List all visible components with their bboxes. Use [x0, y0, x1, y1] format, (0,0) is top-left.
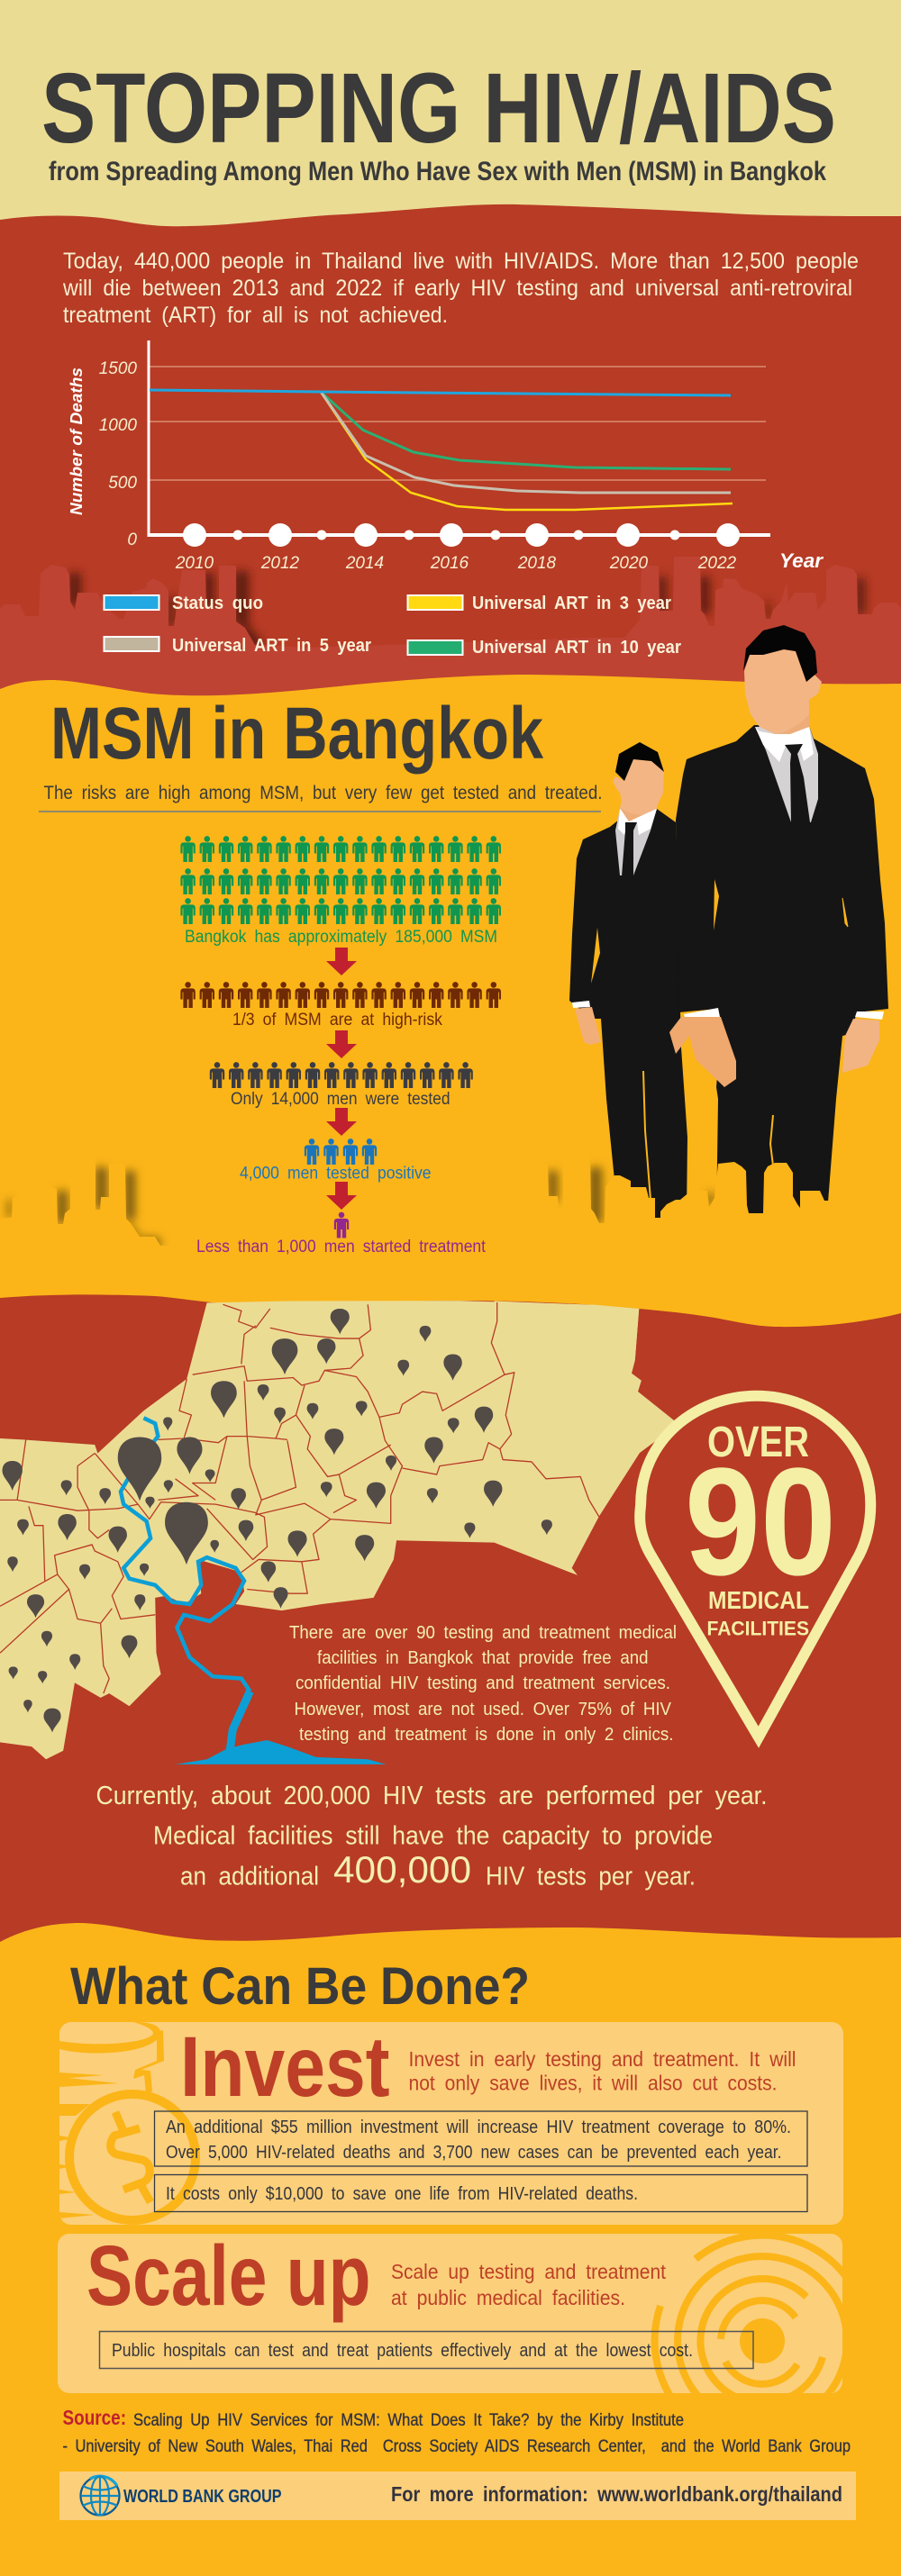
big pin text: OVER 90 MEDICAL FACILITIES: 90: [685, 1437, 836, 1608]
footer bar: For more information: www.worldbank.org/thailand: [391, 2482, 842, 2506]
intro text: treatment (ART) for all is not achieved.: [63, 303, 448, 328]
panel: Invest: It costs only $10,000 to save one life from HIV-related deaths.: [166, 2183, 638, 2204]
source: Scaling Up HIV Services for MSM: What Does It Take? by the Kirby Institute: [133, 2411, 684, 2430]
people chart: positive: 4,000 men tested positive: [240, 1164, 431, 1184]
man: smaller figure: [569, 742, 687, 1225]
chart legend: [105, 594, 681, 658]
panel: Invest: [54, 2019, 843, 2225]
chart: deaths projection: 2018: [517, 554, 557, 573]
chart legend: Status quo: [172, 594, 263, 613]
map eastern province: [495, 1302, 674, 1516]
panel: Invest: not only save lives, it will also cut costs.: [409, 2072, 777, 2095]
facility pins: [3, 1309, 552, 1733]
chart legend: Universal ART in 10 year: [472, 638, 681, 658]
panel: Scale up: Scale up testing and treatment: [391, 2260, 667, 2283]
chart legend: Universal ART in 3 year: [472, 594, 671, 613]
people chart: high-risk: [180, 982, 501, 1029]
chart: deaths projection: 2012: [260, 554, 300, 573]
people chart: 185,000 MSM: Bangkok has approximately 185,000 MSM: [185, 928, 497, 947]
chart: deaths projection: 2022: [697, 554, 737, 573]
people chart: treatment: Less than 1,000 men started treatment: [196, 1238, 487, 1256]
map paragraph: [289, 1623, 677, 1745]
source: [63, 2406, 851, 2456]
panel: Scale up: at public medical facilities.: [391, 2286, 625, 2309]
panel: Invest: Invest in early testing and treatment. It will: [409, 2047, 796, 2071]
heading: MSM in Bangkok: MSM in Bangkok: [50, 693, 543, 775]
subheading: The risks are high among MSM, but very few get tested and treated.: [43, 783, 602, 803]
map paragraph: facilities in Bangkok that provide free and: [317, 1648, 649, 1668]
footer bar: WORLD BANK GROUP: [123, 2487, 281, 2507]
map district boundaries: [0, 1302, 601, 1693]
footer bar: [59, 2472, 856, 2520]
capacity statement: [96, 1782, 768, 1891]
background: gold MSM section: [0, 667, 901, 1315]
skyline silhouette: gold, left: [0, 1156, 216, 1279]
man: larger figure: [669, 625, 888, 1225]
capacity statement: Medical facilities still have the capacity to provide: [153, 1821, 713, 1850]
icon: target rings: [651, 2234, 842, 2393]
background: red intro section: [0, 204, 901, 698]
map paragraph: There are over 90 testing and treatment medical: [289, 1623, 677, 1643]
arrow: [326, 948, 357, 975]
map paragraph: confidential HIV testing and treatment services.: [296, 1673, 670, 1693]
background: red map section: [0, 1294, 901, 1955]
arrow: [326, 1108, 357, 1136]
panel: Invest: Over 5,000 HIV-related deaths and 3,700 new cases can be prevented each year.: [166, 2142, 782, 2163]
panel: Scale up: [58, 2234, 842, 2393]
chart: deaths projection: 2020: [609, 554, 649, 573]
icon: World Bank globe: [81, 2476, 119, 2515]
capacity statement: an additional: [180, 1863, 319, 1891]
big pin text: OVER 90 MEDICAL FACILITIES: MEDICAL: [708, 1586, 809, 1614]
chart: deaths projection: 1500: [99, 359, 137, 378]
panel: Invest: An additional $55 million investment will increase HIV treatment coverage to 80%.: [166, 2117, 791, 2137]
people chart: positive: [240, 1138, 431, 1184]
panel: Invest: Invest: [180, 2019, 389, 2115]
chart: deaths projection: 2016: [430, 554, 469, 573]
city skyline: red: [0, 557, 901, 698]
chart: deaths projection: 2010: [175, 554, 214, 573]
chart: deaths projection: [68, 340, 824, 573]
people chart: treatment: [196, 1212, 487, 1256]
skyline shadows: gold: [7, 1167, 714, 1247]
chart legend: Universal ART in 5 year: [172, 636, 371, 656]
map of Bangkok: [0, 1301, 870, 1764]
intro text: [62, 249, 859, 328]
map paragraph: However, most are not used. Over 75% of HIV: [294, 1700, 672, 1719]
chart: deaths projection: Year: [779, 549, 824, 572]
chart: deaths projection: 500: [108, 474, 137, 493]
people chart: tested: [210, 1062, 473, 1109]
capacity statement: Currently, about 200,000 HIV tests are performed per year.: [96, 1782, 768, 1810]
icon: coins: [54, 2022, 196, 2225]
skyline silhouette: gold, right: [529, 1155, 901, 1279]
chart: deaths projection: 2014: [345, 554, 384, 573]
people chart: 185,000 MSM: [180, 836, 501, 947]
big pin text: OVER 90 MEDICAL FACILITIES: OVER: [707, 1419, 809, 1466]
big pin outline: [640, 1396, 870, 1737]
chart: deaths projection: 0: [127, 531, 137, 549]
people chart: high-risk: 1/3 of MSM are at high-risk: [232, 1011, 442, 1029]
panel: Scale up: Scale up: [86, 2228, 371, 2324]
capacity statement: HIV tests per year.: [486, 1863, 696, 1891]
big pin text: OVER 90 MEDICAL FACILITIES: FACILITIES: [706, 1618, 809, 1639]
arrow: [326, 1030, 357, 1058]
capacity statement: 400,000: [333, 1848, 471, 1891]
intro text: will die between 2013 and 2022 if early HIV testing and universal anti-retroviral: [62, 276, 852, 301]
source: Source:: [63, 2406, 126, 2429]
background: gold action section: [0, 1923, 901, 2576]
people chart: tested: Only 14,000 men were tested: [231, 1090, 450, 1109]
intro text: Today, 440,000 people in Thailand live with HIV/AIDS. More than 12,500 people: [63, 249, 859, 274]
background: gold wave into MSM section: [0, 675, 901, 1315]
chart: deaths projection: Number of Deaths: [68, 367, 86, 515]
heading: What Can Be Done?: What Can Be Done?: [70, 1957, 530, 2016]
panel: Scale up: Public hospitals can test and treat patients effectively and at the lowest cost.: [112, 2340, 693, 2361]
map outline: [0, 1301, 674, 1759]
background: cream header: [0, 0, 901, 243]
river: [121, 1418, 387, 1764]
map paragraph: testing and treatment is done in only 2 clinics.: [299, 1725, 674, 1745]
chart: deaths projection: 1000: [99, 416, 137, 435]
arrow: [326, 1182, 357, 1210]
